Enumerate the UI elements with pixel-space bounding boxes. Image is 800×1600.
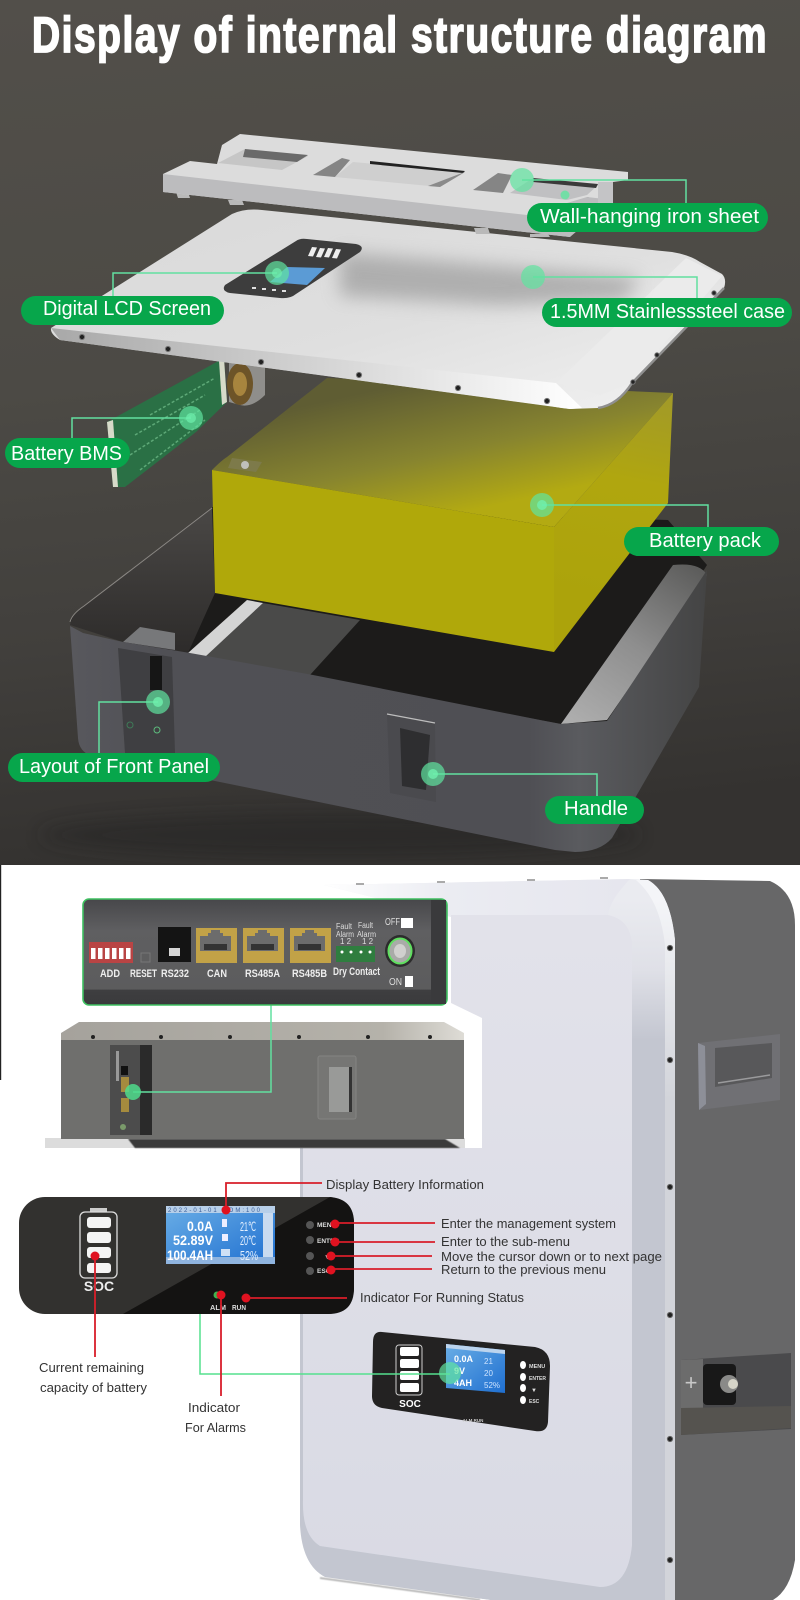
callout: battery pack: Battery pack — [649, 530, 762, 552]
electrolytic capacitor — [227, 360, 265, 406]
side screws — [667, 945, 673, 1563]
callout: battery pack — [530, 493, 779, 556]
small LCD module: SOC — [399, 1399, 421, 1410]
handle recess — [387, 714, 436, 802]
RS485A port — [243, 928, 284, 963]
reset button — [141, 953, 150, 962]
wall-hanging iron sheet — [163, 134, 628, 237]
white edge strip — [636, 880, 675, 1600]
middle hole — [313, 158, 350, 177]
front face — [303, 915, 632, 1587]
lid front strip — [51, 328, 582, 409]
callout: stainless steel case: 1.5MM Stainlesssteel case — [550, 301, 785, 323]
side-view screws — [91, 1035, 432, 1039]
feet — [176, 192, 550, 237]
battery terminal — [228, 458, 262, 472]
LCD screen: 52.89V — [173, 1232, 214, 1248]
callout: move the cursor down — [326, 1249, 662, 1264]
small LCD module: ENTER — [529, 1376, 546, 1382]
LCD screen: 2022-01-01 ROM:100 — [168, 1208, 261, 1214]
port labels: Dry Contact — [333, 966, 380, 978]
interior right wall — [561, 564, 707, 724]
callout: battery BMS: Battery BMS — [11, 443, 122, 465]
callout: indicator for alarms: For Alarms — [185, 1421, 246, 1435]
callout: enter to the sub-menu — [330, 1234, 570, 1249]
on/off labels — [385, 917, 413, 988]
fault alarm labels: 1 2 — [362, 937, 374, 946]
on/off labels: OFF — [385, 917, 400, 928]
callout: indicator for running status: Indicator For Running Status — [360, 1290, 524, 1305]
callout: wall-hanging iron sheet: Wall-hanging iron sheet — [540, 206, 759, 228]
LCD screen: 52% — [240, 1248, 258, 1263]
callout: display battery information — [222, 1177, 484, 1214]
callout: move the cursor down: Move the cursor down or to next page — [441, 1249, 662, 1264]
callout: return to previous menu — [326, 1262, 606, 1277]
port labels: RS485A — [245, 968, 280, 980]
top tabs — [356, 878, 608, 884]
callout: wall-hanging iron sheet — [510, 168, 768, 232]
small LCD module: 20 — [484, 1369, 493, 1378]
status indicators: ALM — [210, 1305, 226, 1312]
DIP switch — [89, 942, 133, 963]
dry contact terminal — [336, 946, 375, 962]
fault alarm labels: Alarm — [357, 930, 376, 939]
callout: current remaining capacity — [39, 1252, 148, 1395]
power terminal window: + — [685, 1370, 697, 1395]
menu buttons: ESC — [317, 1268, 331, 1275]
small battery icon — [396, 1345, 422, 1395]
white cover behind front panel — [0, 865, 482, 1600]
small LCD module: 4AH — [454, 1378, 472, 1388]
side handle — [698, 1034, 780, 1110]
interior rail — [205, 603, 360, 675]
stainless steel case lid — [51, 210, 725, 409]
lid LCD module — [224, 239, 362, 298]
callout: indicator for running status — [242, 1290, 524, 1305]
CAN port — [196, 928, 237, 963]
LCD control panel — [19, 1197, 354, 1314]
fault alarm labels: Fault — [336, 922, 353, 931]
callout: enter to the sub-menu: Enter to the sub-menu — [441, 1234, 570, 1249]
port labels — [100, 966, 380, 980]
callout: indicator for alarms: Indicator — [188, 1401, 240, 1415]
port labels: RS232 — [161, 968, 189, 980]
small LCD module: ESC — [529, 1399, 540, 1405]
box interior — [70, 507, 707, 724]
LCD screen — [166, 1206, 275, 1264]
small LCD module: 21 — [484, 1357, 493, 1366]
menu buttons: ENTER — [317, 1238, 339, 1245]
power switch — [385, 935, 415, 967]
battery pack — [212, 378, 673, 652]
callout: layout of front panel — [8, 690, 220, 782]
lid screws — [79, 291, 716, 404]
LCD screen: 21℃ — [240, 1219, 256, 1234]
callout: enter the management system: Enter the management system — [441, 1216, 616, 1231]
box front face — [70, 570, 707, 852]
left notch — [218, 149, 308, 170]
callout: handle — [421, 762, 644, 824]
port labels: RESET — [130, 968, 157, 980]
port labels: ADD — [100, 968, 120, 980]
LCD screen: 100.4AH — [167, 1247, 213, 1263]
callout: return to previous menu: Return to the previous menu — [441, 1262, 606, 1277]
status indicators: RUN — [232, 1305, 246, 1312]
panel: exploded view background — [0, 0, 800, 865]
port labels: CAN — [207, 968, 227, 980]
bottom bevel shadow — [325, 1578, 490, 1600]
power terminal window — [681, 1353, 791, 1435]
battery gauge icon: SOC — [84, 1278, 114, 1294]
menu buttons — [306, 1221, 339, 1275]
small LCD module: 0.0A — [454, 1354, 474, 1364]
callout: current remaining capacity: Current remaining — [39, 1361, 144, 1375]
callout line: side view to port panel — [125, 1005, 271, 1100]
lid shadow patch — [340, 252, 640, 305]
callout: digital LCD screen: Digital LCD Screen — [43, 298, 211, 320]
small LCD module: 52% — [484, 1381, 500, 1390]
small LCD module: 9V — [454, 1366, 465, 1376]
callout: enter the management system — [330, 1216, 616, 1231]
battery enclosure box — [40, 507, 707, 857]
front panel port strip — [118, 648, 175, 753]
side-view handle — [318, 1056, 356, 1119]
panel: lower white section — [0, 865, 800, 1600]
body — [300, 879, 675, 1600]
callout: digital LCD screen — [21, 261, 289, 325]
status indicators — [210, 1292, 246, 1312]
right hole — [473, 173, 512, 193]
green link from control panel to small module — [200, 1314, 461, 1384]
fault alarm labels: Alarm — [336, 930, 354, 939]
small LCD module: ▼ — [531, 1388, 537, 1394]
callout: indicator for alarms — [185, 1290, 246, 1435]
callout: current remaining capacity: capacity of battery — [40, 1381, 148, 1395]
side view of battery module — [45, 1022, 465, 1148]
menu buttons: MENU — [317, 1222, 336, 1229]
port panel close-up — [83, 899, 447, 1005]
side-view port strip — [110, 1045, 152, 1135]
dark side panel — [640, 879, 795, 1600]
callout: stainless steel case — [521, 265, 792, 327]
battery gauge icon — [80, 1208, 117, 1294]
callout: handle: Handle — [564, 798, 628, 820]
RS232 port — [158, 927, 191, 962]
callout: display battery information: Display Battery Information — [326, 1177, 484, 1192]
fault alarm labels — [336, 921, 376, 946]
callout: battery BMS — [5, 406, 203, 468]
menu buttons: ▼ — [324, 1254, 330, 1261]
fault alarm labels: 1 2 — [340, 937, 352, 946]
RS485B port — [290, 928, 331, 963]
on/off labels: ON — [389, 977, 402, 988]
top bevel band — [324, 879, 630, 917]
LCD screen: 0.0A — [187, 1218, 213, 1234]
port labels: RS485B — [292, 968, 327, 980]
small LCD module — [372, 1332, 550, 1431]
fault alarm labels: Fault — [358, 921, 374, 930]
LCD screen: 20℃ — [240, 1233, 256, 1248]
callout: layout of front panel: Layout of Front Panel — [19, 756, 209, 778]
lid right bevel — [556, 258, 722, 395]
small LCD module: MENU — [529, 1364, 545, 1370]
small LCD module: ALM RUN — [463, 1418, 483, 1423]
BMS board — [107, 358, 227, 487]
wall-mounted battery unit — [300, 878, 795, 1600]
